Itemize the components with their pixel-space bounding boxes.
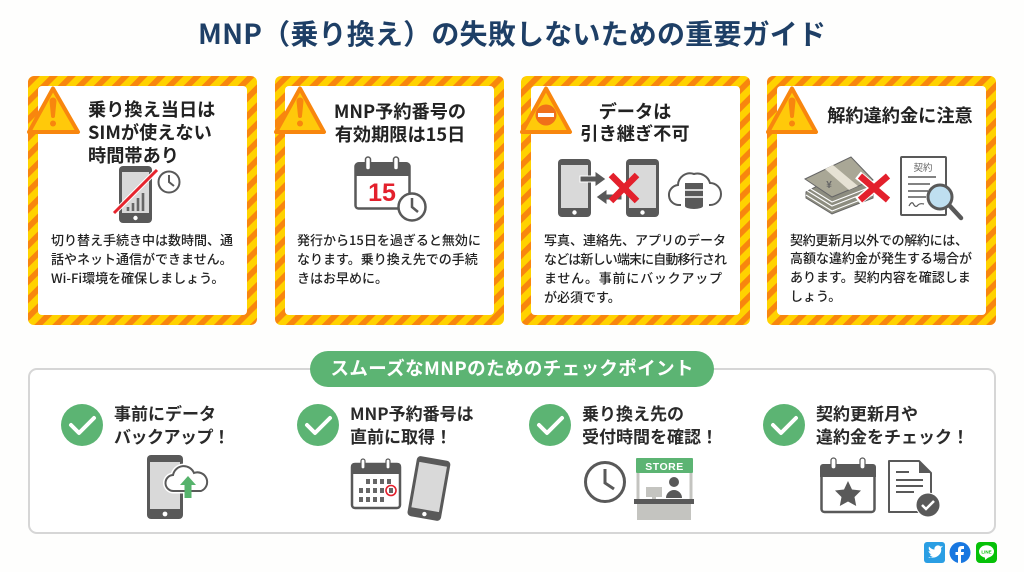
label: MNP予約番号は xyxy=(350,400,474,425)
heading pill: スムーズなMNPのためのチェックポイント xyxy=(330,355,694,381)
body text: 話やネット通信ができません。 xyxy=(51,249,233,268)
label: 受付時間を確認！ xyxy=(582,423,718,448)
heading: 時間帯あり xyxy=(88,142,179,168)
body text: 切り替え手続き中は数時間、通 xyxy=(51,230,233,249)
label: 違約金をチェック！ xyxy=(816,423,969,448)
label: バックアップ！ xyxy=(114,423,230,448)
icon: warning triangle with no-entry sign xyxy=(522,88,570,132)
icon: warning triangle xyxy=(768,88,816,132)
heading: 乗り換え当日は xyxy=(88,96,215,122)
panel: cancellation fee xyxy=(767,76,996,325)
heading: 有効期限は15日 xyxy=(335,121,465,147)
body text: 高額な違約金が発生する場合が xyxy=(790,248,972,267)
label: 事前にデータ xyxy=(114,400,216,425)
body text: ません。事前にバックアップ xyxy=(544,268,722,287)
icon: facebook xyxy=(950,542,970,563)
icon: check mark xyxy=(61,404,103,446)
label xyxy=(350,400,474,448)
icon: LINE: LINE xyxy=(981,550,992,554)
title: MNP（乗り換え）の失敗しないための重要ガイド xyxy=(198,13,826,53)
icon: LINE xyxy=(976,542,997,563)
icon: check mark xyxy=(763,404,805,446)
label: 直前に取得！ xyxy=(350,423,452,448)
icon: two phones with blocked transfer and cloud xyxy=(558,159,721,217)
heading xyxy=(580,98,690,146)
icon: store counter xyxy=(634,458,694,520)
label xyxy=(816,400,969,448)
body text xyxy=(51,230,233,287)
icon: phone with upload cloud xyxy=(147,455,207,519)
heading pill xyxy=(310,351,714,387)
icon: banknotes with X and contract xyxy=(805,157,961,218)
panel: MNP number validity xyxy=(275,76,504,325)
body text: などは新しい端末に自動移行され xyxy=(544,249,727,268)
checkpoint: get number just before xyxy=(297,400,474,521)
heading: 引き継ぎ不可 xyxy=(580,120,690,146)
label xyxy=(582,400,718,448)
body text xyxy=(790,230,972,305)
checkpoint: check renewal month and fee xyxy=(763,400,969,517)
icon: clock xyxy=(586,462,624,502)
body text: Wi-Fi環境を確保しましょう。 xyxy=(51,268,224,287)
icon: twitter xyxy=(924,542,945,563)
heading: SIMが使えない xyxy=(88,119,212,145)
checkpoint: confirm reception hours xyxy=(529,400,718,520)
heading: 解約違約金に注意 xyxy=(827,102,973,128)
body text: 発行から15日を過ぎると無効に xyxy=(297,230,481,249)
icon: warning triangle xyxy=(29,88,78,132)
label xyxy=(114,400,230,448)
heading: MNP予約番号の xyxy=(334,98,466,124)
icon: calendar 15 with clock: 15 xyxy=(368,179,396,207)
icon: calendar and tilted phone xyxy=(351,456,451,521)
body text: しょう。 xyxy=(790,286,841,305)
icon: calendar 15 with clock xyxy=(355,157,426,220)
icon: warning triangle xyxy=(276,88,324,132)
icon: phone with no signal and clock xyxy=(114,166,180,223)
heading xyxy=(334,98,466,147)
icon: check mark xyxy=(529,404,571,446)
heading xyxy=(88,96,215,168)
icon: banknotes with X and contract: ¥ xyxy=(826,180,832,191)
checkpoint: back up data xyxy=(61,400,230,519)
icon: calendar with star xyxy=(820,458,876,512)
panel: data cannot transfer xyxy=(521,76,750,325)
body text xyxy=(544,230,727,306)
body text: きはお早めに。 xyxy=(297,268,388,287)
heading: データは xyxy=(599,98,671,124)
body text: 契約更新月以外での解約には、 xyxy=(790,230,968,249)
icon: document with check badge xyxy=(889,461,940,517)
panel: SIM unavailable warning xyxy=(28,76,257,325)
icon: store counter: STORE xyxy=(645,461,684,473)
body text: あります。契約内容を確認しま xyxy=(790,267,971,286)
body text xyxy=(297,230,481,287)
body text: 写真、連絡先、アプリのデータ xyxy=(544,230,726,249)
panel: checkpoints xyxy=(29,351,995,533)
body text: なります。乗り換え先での手続 xyxy=(297,249,478,268)
icon: banknotes with X and contract: 契約 xyxy=(913,162,933,174)
label: 契約更新月や xyxy=(816,400,918,425)
icon: check mark xyxy=(297,404,339,446)
body text: が必須です。 xyxy=(544,287,621,306)
label: 乗り換え先の xyxy=(582,400,684,425)
